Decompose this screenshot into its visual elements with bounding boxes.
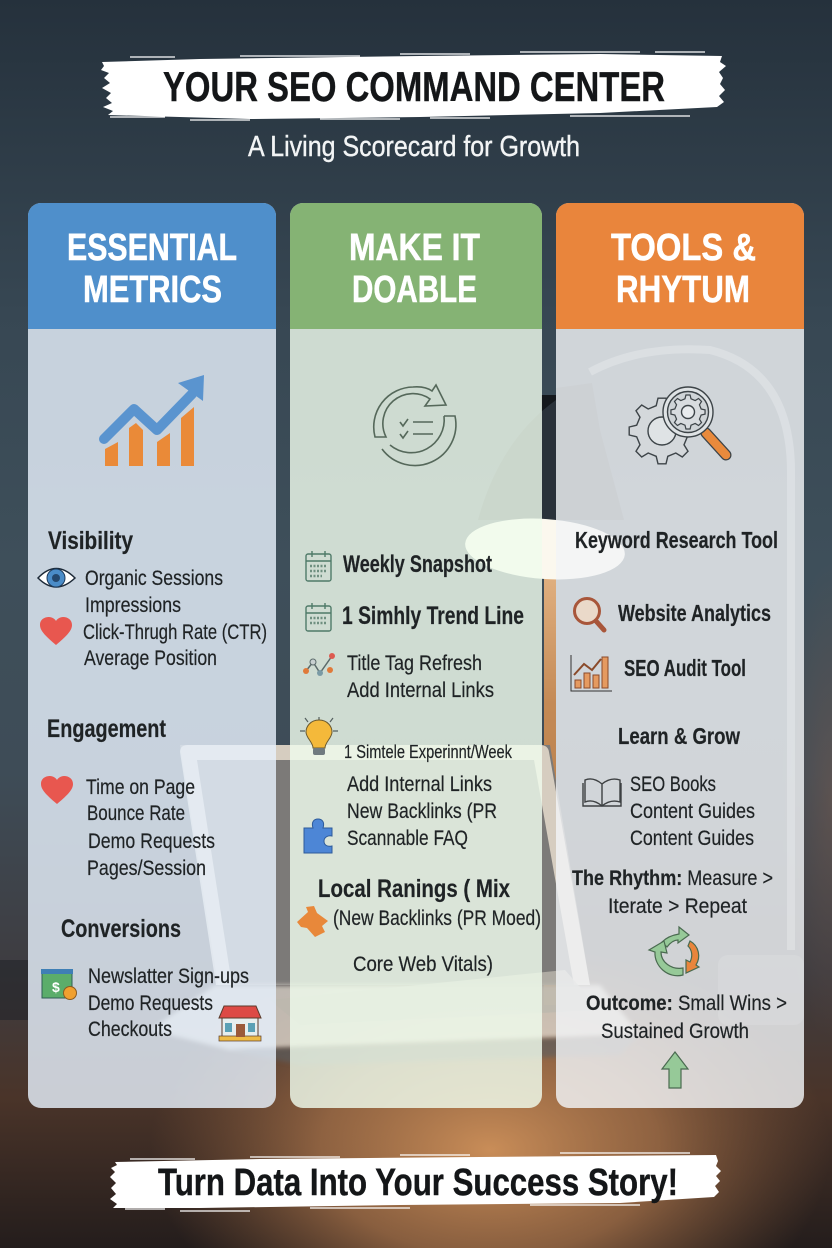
text: outcome: Sustained Growth [601,1020,749,1043]
list: experiment ideas: Add Internal Links [347,773,492,796]
icon: heart [41,776,73,804]
list: visibility metrics: Click-Thrugh Rate (CTR) [83,621,267,644]
item: experiment: 1 Simtele Experinnt/Week [344,742,513,762]
item: core web vitals: Core Web Vitals) [353,953,493,976]
item: seo audit tool: SEO Audit Tool [624,655,746,681]
header: tools and rhythm: TOOLS & [611,227,756,269]
text: the rhythm: Iterate > Repeat [608,895,747,918]
title banner: YOUR SEO COMMAND CENTER [163,63,665,110]
list: learning resources: Content Guides [630,827,754,850]
icon: open book [583,779,621,806]
text: the rhythm: The Rhythm: Measure > [572,867,773,890]
list: engagement metrics [86,776,215,880]
icon: up arrow [662,1052,688,1088]
icon: orange puzzle piece [297,906,328,937]
heading: visibility: Visibility [48,527,133,555]
list: experiment ideas: New Backlinks (PR [347,800,497,823]
icon: money box: $ [52,979,60,995]
header: make it doable: MAKE IT [349,227,480,269]
list: visibility metrics: Impressions [85,594,181,617]
title banner [101,52,726,120]
header: make it doable: DOABLE [352,269,477,311]
list: conversion metrics [88,965,249,1041]
list: conversion metrics: Demo Requests [88,992,213,1015]
icon: light bulb [300,717,338,755]
panel: make it doable [290,203,542,1108]
text: the rhythm [572,867,773,918]
item: local rankings: Local Ranings ( Mix [318,875,510,903]
list: learning resources: Content Guides [630,800,755,823]
bottom banner: Turn Data Into Your Success Story! [158,1162,678,1204]
heading: conversions: Conversions [61,915,181,943]
list: quick fixes: Title Tag Refresh [347,652,482,675]
panel: essential metrics [28,203,276,1108]
list: engagement metrics: Bounce Rate [87,802,185,825]
item: trend line: 1 Simhly Trend Line [342,602,524,630]
list: engagement metrics: Time on Page [86,776,195,799]
list: conversion metrics: Checkouts [88,1018,172,1041]
header: tools and rhythm [556,203,804,329]
icon: calendar [306,603,331,631]
icon: magnifier [574,598,604,630]
icon: money box [41,969,76,1000]
list: visibility metrics: Average Position [84,647,217,670]
item: weekly snapshot: Weekly Snapshot [343,551,492,578]
header: essential metrics: ESSENTIAL [67,227,237,269]
icon: trend nodes [303,653,335,676]
heading: learn and grow: Learn & Grow [618,723,740,749]
icon: growth chart [104,375,204,466]
icon: bar chart [571,655,612,691]
list: conversion metrics: Newslatter Sign-ups [88,965,249,988]
list: learning resources: SEO Books [630,773,716,796]
icon: heart [40,617,72,645]
item: website analytics: Website Analytics [618,600,771,626]
item: keyword research tool: Keyword Research Tool [575,527,778,553]
icon: eye [38,568,75,587]
list: experiment ideas: Scannable FAQ [347,827,468,850]
text: outcome: Outcome: Small Wins > [586,992,787,1015]
list: engagement metrics: Pages/Session [87,857,206,880]
header: essential metrics: METRICS [83,269,222,311]
list: visibility metrics: Organic Sessions [85,567,223,590]
list: learning resources [630,773,755,850]
list: quick fixes [347,652,494,702]
icon: gear and magnifier [629,387,726,464]
panel: tools and rhythm [556,203,804,1108]
heading: engagement: Engagement [47,715,167,743]
header: make it doable [290,203,542,329]
subtitle: A Living Scorecard for Growth [248,131,580,163]
icon: cycle arrows [649,927,699,976]
text: outcome [586,992,787,1043]
icon: storefront [219,1006,261,1041]
header: essential metrics [28,203,276,329]
icon: calendar [306,551,331,581]
bottom banner [110,1153,721,1211]
list: experiment ideas [347,773,497,850]
icon: checklist cycle [374,385,456,466]
list: visibility metrics [83,567,267,670]
list: engagement metrics: Demo Requests [88,830,215,853]
list: quick fixes: Add Internal Links [347,679,494,702]
header: tools and rhythm: RHYTUM [616,269,750,311]
item: new backlinks: (New Backlinks (PR Moed) [333,907,541,930]
icon: blue puzzle piece [304,819,332,853]
